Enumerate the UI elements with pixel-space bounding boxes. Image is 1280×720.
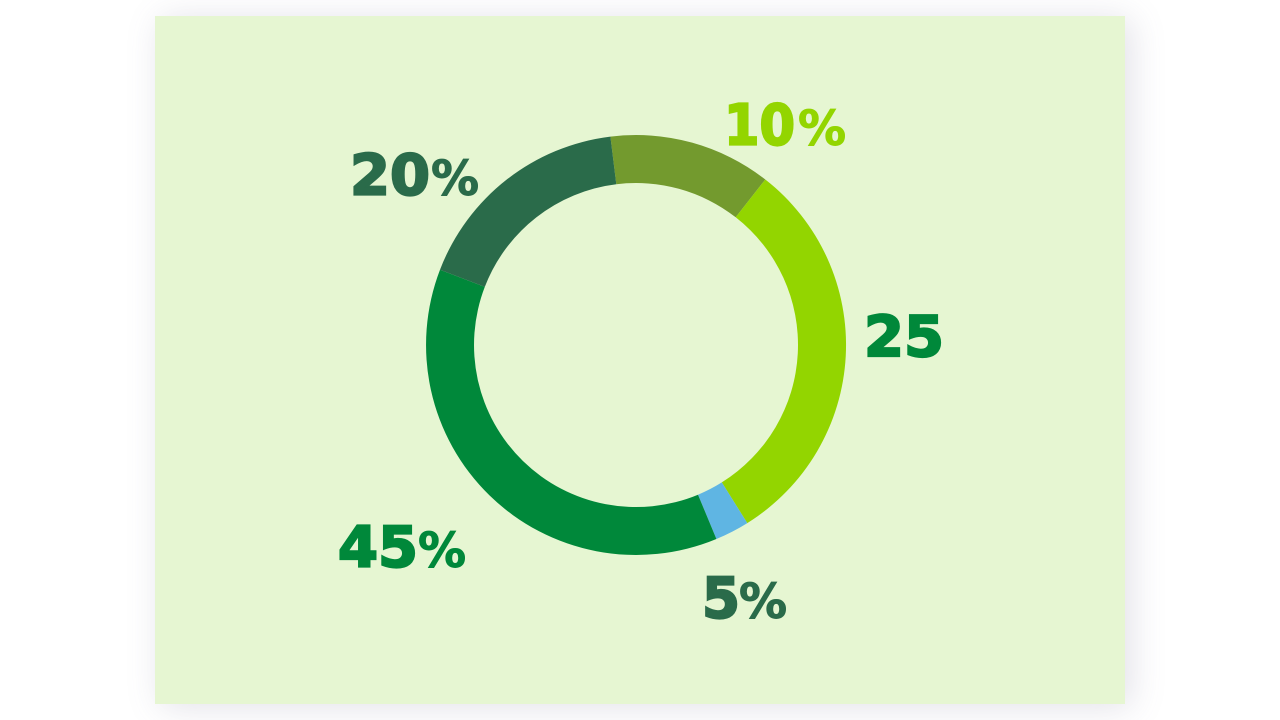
label: 45%	[338, 516, 466, 580]
label: 10%	[724, 94, 846, 158]
label: 45%: %	[418, 523, 466, 579]
segment: 45% green	[426, 270, 716, 555]
label: 10%: %	[798, 101, 846, 157]
label: 5%	[702, 566, 787, 632]
label: 20%: %	[431, 151, 479, 207]
donut ring	[426, 135, 846, 555]
segment: 10% olive	[610, 135, 765, 217]
label: 5%: %	[739, 574, 787, 630]
label: 45%: 45	[338, 516, 418, 580]
label: 20%: 20	[350, 144, 430, 208]
segment: 25 lime	[722, 180, 846, 523]
label: 25: 25	[864, 305, 944, 370]
label: 5%: 5	[702, 566, 740, 632]
label: 10%: 10	[724, 94, 795, 158]
label: 20%	[350, 144, 479, 208]
segment: 5% blue	[698, 482, 747, 539]
panel: chart background	[155, 16, 1125, 704]
segment: 20% dark green	[440, 137, 616, 287]
